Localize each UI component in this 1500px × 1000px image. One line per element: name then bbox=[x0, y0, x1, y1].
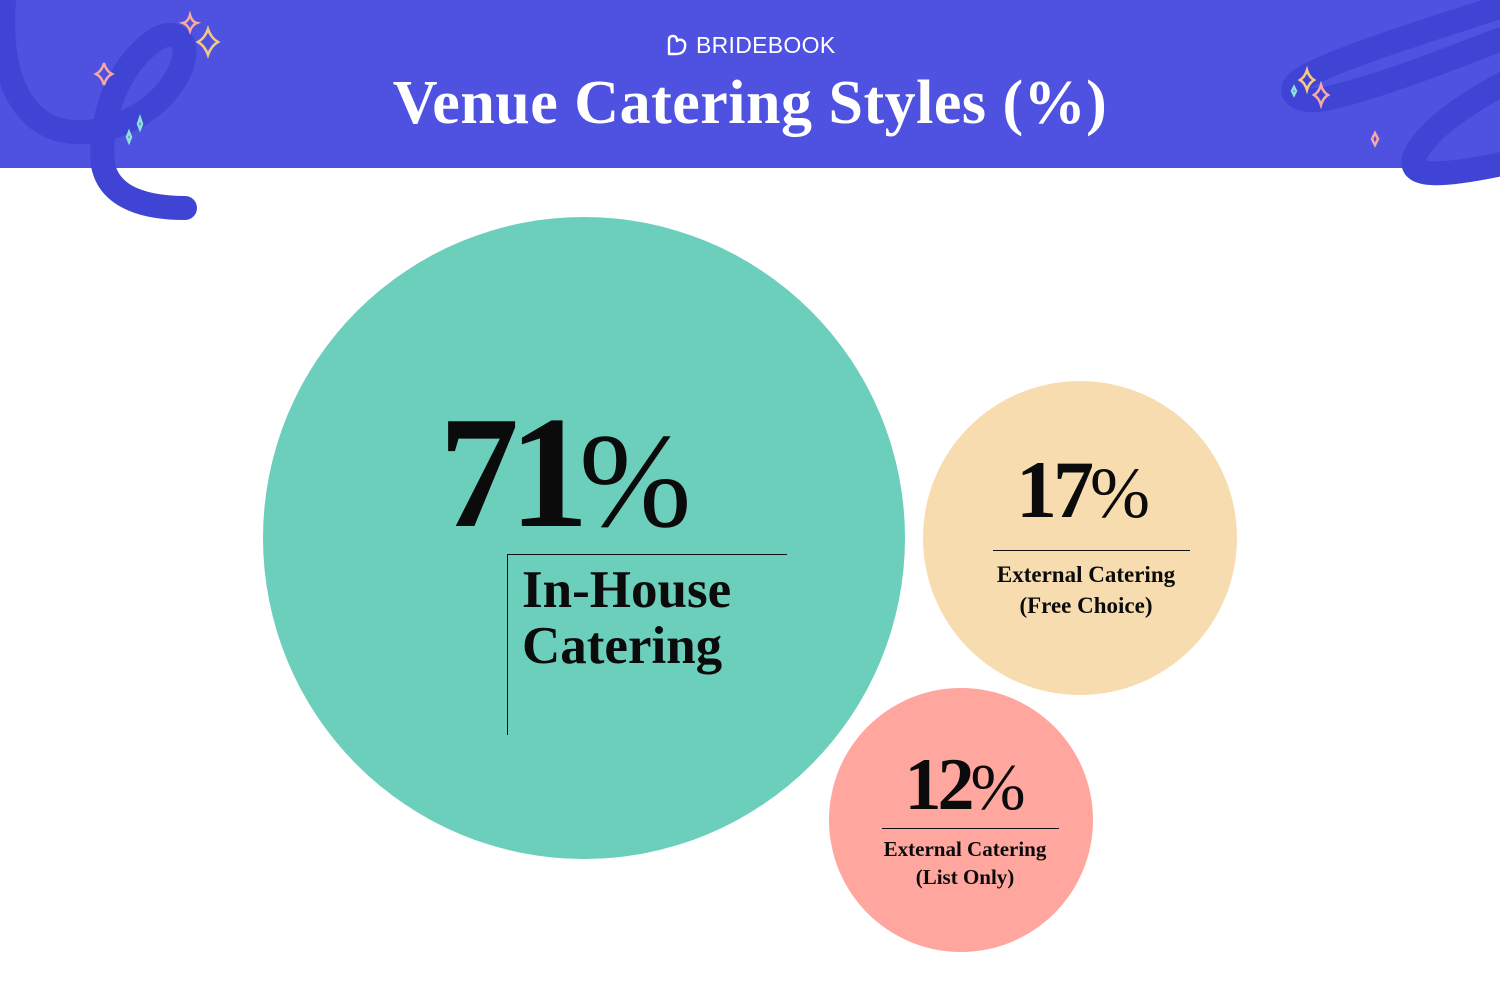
logo: BRIDEBOOK: BRIDEBOOK bbox=[696, 32, 835, 58]
label: In-House Catering bbox=[522, 561, 731, 675]
circle: external free choice 17% bbox=[923, 381, 1237, 695]
value 12%: 12% bbox=[904, 744, 1025, 826]
label: In-House Catering: In-House bbox=[522, 561, 731, 619]
label: External Catering (Free Choice): External Catering bbox=[997, 562, 1175, 587]
value 17%: 17% bbox=[1016, 444, 1150, 535]
header band bbox=[0, 0, 1500, 168]
label: In-House Catering: Catering bbox=[522, 617, 722, 675]
label: External Catering (List Only): External Catering bbox=[884, 837, 1046, 861]
circle: in-house 71% bbox=[263, 217, 905, 859]
value 71%: 71% bbox=[439, 383, 691, 561]
label: External Catering (Free Choice): (Free Choice) bbox=[1019, 593, 1153, 618]
label: External Catering (List Only): (List Only) bbox=[916, 865, 1014, 889]
circle: external list only 12% bbox=[829, 688, 1093, 952]
decorative swirls and sparkles bbox=[0, 0, 1500, 220]
label: External Catering (List Only) bbox=[884, 837, 1046, 889]
label frame lines bbox=[507, 554, 787, 735]
label: External Catering (Free Choice) bbox=[997, 562, 1175, 618]
title: Venue Catering Styles (%) bbox=[393, 69, 1107, 137]
